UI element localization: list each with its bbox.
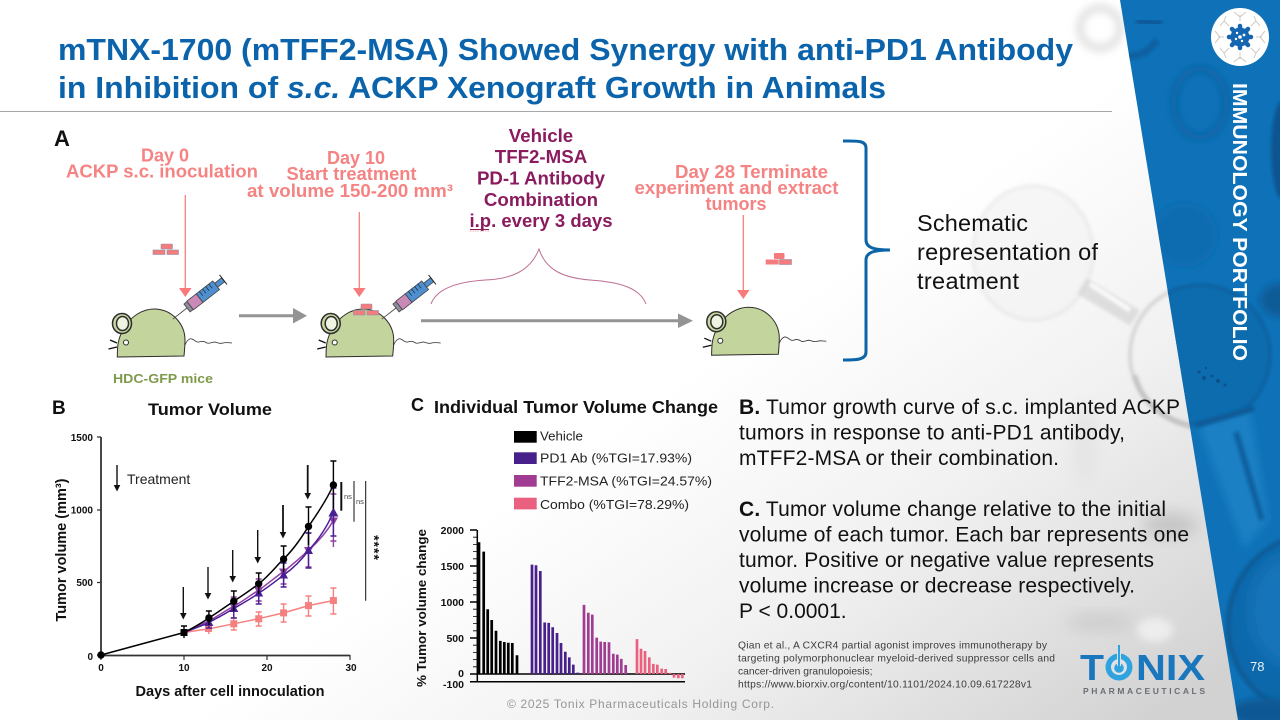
label: day 10: Start treatment [286, 164, 417, 184]
schematic caption: representation of [917, 239, 1098, 265]
bars: vehicle [479, 542, 517, 674]
axis tick labels: 2000 [441, 525, 464, 537]
axes [470, 530, 685, 682]
panel C: waterfall bar chart [411, 395, 718, 691]
immunology portfolio logo [1211, 8, 1269, 66]
bars: TFF2-MSA [584, 605, 626, 674]
blue bracket [843, 141, 890, 360]
label: treatment groups: Combination [484, 189, 598, 210]
axis tick labels [71, 433, 357, 674]
grey arrow long [421, 314, 693, 328]
citation: https://www.biorxiv.org/content/10.1101/2024.10.09.617228v1 [738, 680, 1032, 690]
label: treatment groups: PD-1 Antibody [477, 168, 606, 188]
label: day 28: tumors [705, 194, 767, 214]
axis tick labels: 500 [446, 633, 464, 645]
label: day 10: at volume 150-200 mm³ [247, 181, 453, 201]
description text: tumors in response to anti-PD1 antibody, [739, 422, 1125, 444]
citation [738, 640, 1055, 690]
axis tick labels: 1000 [71, 506, 93, 516]
axis tick labels: 10 [178, 663, 190, 674]
label: day 0 [66, 146, 258, 182]
axis tick labels: 0 [87, 652, 93, 663]
title: mTNX-1700 (mTFF2-MSA) Showed Synergy with anti-PD1 Antibody [58, 32, 1073, 67]
treatment period brace [431, 249, 646, 304]
axis tick labels: 0 [458, 668, 464, 680]
significance markers: ns [344, 492, 352, 501]
legend [514, 428, 712, 512]
tumor cells [153, 244, 792, 315]
axis tick labels: 1000 [441, 597, 464, 609]
description text: C. Tumor volume change relative to the initial [739, 498, 1166, 521]
panel A: treatment schematic [54, 125, 1098, 386]
label: day 0: Day 0 [141, 146, 189, 166]
citation: targeting polymorphonuclear myeloid-derived suppressor cells and [738, 654, 1055, 664]
significance markers: ns [356, 497, 364, 506]
legend: Vehicle [540, 428, 583, 444]
panel letter C: C [411, 395, 424, 415]
treatment legend [114, 465, 190, 492]
chart heading: Tumor Volume [148, 400, 272, 419]
legend: TFF2-MSA (%TGI=24.57%) [540, 474, 712, 488]
axes [97, 437, 350, 660]
label: day 10 [247, 148, 453, 201]
series: vehicle [98, 461, 337, 658]
Tonix logo [1080, 645, 1205, 696]
label: day 28 [634, 162, 839, 214]
label: day 28: Day 28 Terminate [675, 162, 828, 182]
label: day 28: experiment and extract [634, 178, 839, 198]
label: treatment groups: Vehicle [509, 125, 573, 146]
axis tick labels: 30 [345, 663, 357, 674]
mouse 3 [703, 307, 826, 355]
blue side band [1120, 0, 1280, 720]
axis tick labels: 1500 [71, 433, 93, 444]
schematic caption: Schematic [917, 210, 1028, 236]
Tonix logo: T [1080, 647, 1104, 688]
citation: cancer-driven granulopoiesis; [738, 666, 873, 678]
description text: volume increase or decrease respectively. [739, 574, 1135, 598]
y axis title: % Tumor volume change [414, 529, 429, 687]
power icon [1106, 645, 1132, 680]
grey arrow short [239, 308, 307, 324]
citation: Qian et al., A CXCR4 partial agonist improves immunotherapy by [738, 640, 1048, 652]
schematic caption [917, 210, 1098, 294]
blue virus [1229, 26, 1251, 48]
axis tick labels: 0 [98, 663, 104, 674]
title: in Inhibition of s.c. ACKP Xenograft Growth in Animals [58, 70, 886, 105]
axis tick labels [441, 525, 464, 691]
axis tick labels: 20 [261, 663, 273, 674]
panel B: tumor volume line chart [52, 398, 382, 700]
bars: combo [637, 639, 682, 678]
legend: PD1 Ab (%TGI=17.93%) [540, 450, 692, 466]
mouse strain label: HDC-GFP mice [113, 372, 213, 386]
label: treatment groups [470, 125, 612, 231]
syringe 1 [169, 275, 227, 324]
panel letter A: A [54, 126, 70, 151]
panel letter B: B [52, 398, 66, 419]
series: PD1 Ab [184, 488, 338, 632]
tan dendrite branches [1215, 12, 1265, 62]
Tonix logo: NIX [1136, 647, 1205, 688]
label: treatment groups: TFF2-MSA [495, 146, 587, 167]
page number: 78 [1250, 659, 1264, 674]
x axis title: Days after cell innoculation [136, 684, 324, 700]
footer copyright: © 2025 Tonix Pharmaceuticals Holding Corp. [507, 697, 774, 711]
y axis title: Tumor volume (mm³) [54, 478, 70, 622]
significance markers: **** [366, 535, 382, 561]
title [58, 32, 1073, 105]
description text: P < 0.0001. [739, 600, 847, 623]
description text: volume of each tumor. Each bar represents one [739, 524, 1189, 546]
treatment arrows [180, 465, 311, 620]
sidebar label: IMMUNOLOGY PORTFOLIO [1228, 83, 1250, 361]
axis tick labels: -100 [443, 679, 464, 691]
label: treatment groups: i.p. every 3 days [470, 210, 612, 231]
coral arrows [179, 195, 750, 299]
treatment legend: Treatment [127, 471, 190, 487]
description text: B. Tumor growth curve of s.c. implanted ACKP [739, 396, 1180, 419]
Tonix logo: PHARMACEUTICALS [1083, 686, 1205, 696]
label: day 10: Day 10 [327, 148, 385, 168]
axis tick labels: 1500 [441, 561, 464, 573]
schematic caption: treatment [917, 268, 1019, 294]
label: day 0: ACKP s.c. inoculation [66, 162, 258, 182]
legend: Combo (%TGI=78.29%) [540, 497, 689, 512]
chart heading: Individual Tumor Volume Change [434, 397, 718, 417]
description text: tumor. Positive or negative value represents [739, 549, 1154, 572]
axis tick labels: 500 [76, 578, 93, 589]
significance markers [341, 481, 382, 601]
syringe 2 [378, 275, 436, 324]
mouse 2 [317, 309, 441, 357]
mouse 1 [108, 309, 232, 357]
series: TFF2-MSA [184, 494, 338, 632]
description text [739, 396, 1189, 623]
description text: mTFF2-MSA or their combination. [739, 447, 1059, 470]
series: combo [184, 588, 337, 634]
bars: PD1 Ab [532, 565, 578, 674]
